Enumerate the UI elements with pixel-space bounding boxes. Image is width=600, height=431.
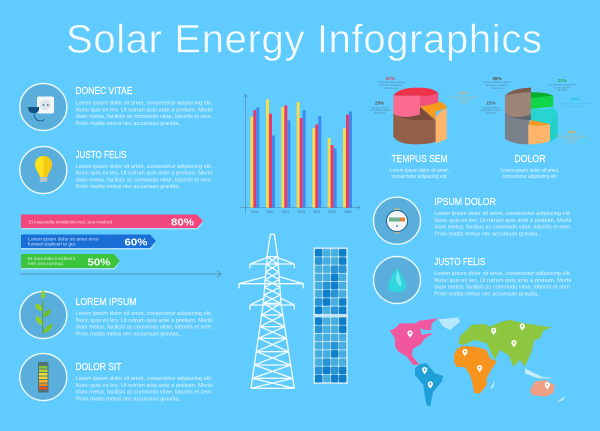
bar: 60%: Lorem ipsum dolor sit amet error: [28, 236, 100, 242]
label: 60%: In hac habitasse platea: [377, 80, 405, 84]
Australia: [530, 380, 555, 397]
text block: Lorem ipsum dolor sit amet, consectetur adipiscing elit.: [434, 271, 572, 277]
heading: DOLOR SIT: [76, 361, 122, 373]
text block: diam metus, facilisis ac commodo vitae, lobortis et sem.: [76, 114, 213, 120]
label: 10%: aenean: [567, 140, 577, 143]
text block: [76, 311, 213, 337]
label: 15%: 15%: [486, 100, 497, 105]
label: 60%: dictumst vestibulum: [379, 83, 403, 87]
pie caption: dolor: Lorem ipsum dolor sit amet,: [500, 168, 560, 174]
text block: diam metus, facilisis ac commodo vitae, lobortis et sem.: [76, 325, 213, 331]
bar: 60%: [21, 234, 156, 250]
label: 15%: est at lobortis: [455, 98, 472, 102]
label: 60%: 60%: [386, 76, 396, 81]
heading: DONEC VITAE: [76, 85, 132, 97]
pie caption: tempus sem: consectetur adipiscing elit.: [392, 174, 448, 180]
text block: Proin mattis metus nec accumsan gravida..: [434, 291, 541, 297]
label: 10%: Sed posuere consectetur: [557, 134, 587, 138]
text block: Nunc quis ex leo. Ut rutrum quis ante a pretium. Morbi: [76, 171, 212, 177]
text block: [76, 100, 213, 127]
bar chart: 2012: [282, 210, 290, 214]
label: 20% teal: est at lobortis: [567, 104, 584, 108]
label: 35%: dictumst vestibulum: [486, 83, 510, 87]
Africa: [454, 346, 497, 393]
text block: Lorem ipsum dolor sit amet, consectetur adipiscing elit.: [76, 164, 213, 170]
text block: [434, 211, 572, 237]
label: 10%: [557, 129, 587, 143]
South America: [415, 363, 443, 407]
text block: diam metus, facilisis ac commodo vitae, lobortis et sem.: [434, 225, 572, 231]
bar chart: 2014: [313, 210, 321, 214]
label: 15%: dignissim: [485, 111, 497, 115]
icon: solar panel: [313, 247, 348, 384]
bar: 50%: Et inacundia incidenint: [28, 256, 76, 261]
pie chart: tempus sem: [369, 76, 478, 144]
text block: Nunc quis ex leo. Ut rutrum quis ante a pretium. Morbi: [434, 218, 571, 224]
label: 25%: sollicitudin massa: [369, 108, 391, 112]
label: 15%: [449, 90, 478, 104]
text block: [76, 376, 213, 402]
Greenland: [438, 317, 460, 330]
text block: diam metus, facilisis ac commodo vitae, lobortis et sem.: [434, 285, 572, 291]
icon: light bulb: [20, 146, 67, 194]
panel: ipsum dolor: [374, 196, 572, 244]
bar chart: 2011: [267, 210, 274, 214]
icon: plug and socket: [20, 84, 67, 130]
label: 20% green: aenean: [558, 89, 567, 92]
icon: meter: [374, 197, 420, 244]
heading: IPSUM DOLOR: [434, 196, 496, 208]
label: 35%: [484, 76, 512, 90]
label: 15%: 15%: [459, 90, 469, 95]
text block: Proin mattis metus nec accumsan gravida..: [434, 231, 541, 237]
panel: justo felis left: [20, 146, 213, 194]
label: 15%: [481, 100, 502, 115]
panel: lorem ipsum: [20, 290, 213, 338]
pie heading: tempus sem: TEMPUS SEM: [392, 153, 448, 165]
text block: Lorem ipsum dolor sit amet, consectetur adipiscing elit.: [76, 376, 213, 382]
label: 25%: Integer lacinia: [371, 105, 388, 109]
bar: 80%: [21, 214, 203, 230]
label: 25%: dignissim: [374, 111, 386, 115]
progress bars: [20, 214, 221, 277]
bar chart: [240, 94, 360, 214]
bar chart: 2010: [251, 210, 259, 214]
label: 60%: [377, 76, 405, 90]
bar: 50%: [21, 254, 120, 270]
Eurasia: [458, 320, 552, 367]
label: 15%: Integer lacinia: [483, 105, 500, 109]
text block: Proin mattis metus nec accumsan gravida..: [76, 184, 182, 190]
text block: [434, 271, 572, 297]
label: 20% teal: Sed posuere consectetur: [560, 101, 590, 105]
text block: Proin mattis metus nec accumsan gravida..: [76, 396, 182, 402]
label: 15%: aenean: [459, 101, 468, 104]
heading: JUSTO FELIS: [76, 149, 126, 161]
label: 10%: est at lobortis: [564, 137, 580, 141]
label: 20% green: [548, 78, 577, 92]
text block: Lorem ipsum dolor sit amet, consectetur adipiscing elit.: [76, 100, 213, 106]
islands: [490, 368, 566, 403]
label: 20% green: est at lobortis: [554, 85, 571, 89]
pie caption: tempus sem: [390, 168, 449, 180]
bar chart: 2015: [328, 210, 336, 214]
text block: Nunc quis ex leo. Ut rutrum quis ante a pretium. Morbi: [434, 278, 571, 284]
text block: Nunc quis ex leo. Ut rutrum quis ante a pretium. Morbi: [76, 107, 212, 113]
bar: 60%: 60%: [124, 236, 148, 248]
bar chart: 2013: [298, 210, 305, 214]
icon: battery: [20, 354, 67, 400]
heading: LOREM IPSUM: [76, 296, 136, 308]
bar chart: 2016: [344, 210, 352, 214]
arrow: [20, 271, 221, 277]
text block: Proin mattis metus nec accumsan gravida..: [76, 331, 182, 337]
label: 20% teal: [560, 97, 590, 108]
label: 25%: 25%: [375, 100, 385, 105]
text block: [76, 164, 213, 190]
label: 35%: 35%: [492, 76, 503, 81]
title: Solar Energy Infographics: [66, 18, 542, 62]
text block: Lorem ipsum dolor sit amet, consectetur adipiscing elit.: [76, 311, 213, 317]
label: 35%: rhoncus est: [491, 86, 505, 90]
text block: diam metus, facilisis ac commodo vitae, lobortis et sem.: [76, 390, 213, 396]
pie caption: dolor: [500, 168, 560, 180]
pie caption: dolor: consectetur adipiscing elit.: [502, 174, 558, 180]
label: 15%: sollicitudin massa: [481, 108, 502, 112]
label: 25%: [369, 100, 391, 115]
pie caption: tempus sem: Lorem ipsum dolor sit amet,: [390, 168, 449, 174]
pie heading: dolor: DOLOR: [514, 153, 546, 165]
label: 10%: 10%: [567, 129, 577, 134]
text block: Proin mattis metus nec accumsan gravida..: [76, 121, 182, 127]
text block: Nunc quis ex leo. Ut rutrum quis ante a pretium. Morbi: [76, 318, 212, 324]
label: 60%: rhoncus est: [384, 86, 398, 90]
icon: transmission tower: [239, 234, 303, 388]
bar: 60%: funsset explicari te gui.: [28, 242, 76, 246]
label: 20% green: Sed posuere consectetur: [548, 83, 577, 87]
icon: green plant: [20, 290, 67, 338]
bar: 50%: 50%: [88, 256, 111, 268]
bar: 50%: mel, eos nostrud.: [28, 261, 64, 266]
bar: 80%: Et inacundia incidenint mel, eos nostrud.: [28, 220, 114, 224]
panel: donec vitae: [20, 84, 213, 130]
panel: justo felis right: [374, 256, 572, 304]
label: 15%: Sed posuere consectetur: [449, 95, 478, 99]
text block: Lorem ipsum dolor sit amet, consectetur adipiscing elit.: [434, 211, 572, 217]
pie chart: dolor: [481, 76, 590, 144]
panel: dolor sit: [20, 354, 213, 402]
North America: [383, 318, 438, 365]
bar: 80%: 80%: [171, 216, 195, 228]
text block: diam metus, facilisis ac commodo vitae, lobortis et sem.: [76, 177, 213, 183]
icon: water drop: [374, 256, 420, 304]
map pins: [407, 323, 550, 389]
label: 35%: In hac habitasse platea: [484, 80, 512, 84]
heading: JUSTO FELIS: [434, 256, 485, 268]
text block: Nunc quis ex leo. Ut rutrum quis ante a pretium. Morbi: [76, 383, 212, 389]
label: 20% green: 20%: [558, 78, 568, 83]
label: 20% teal: 20%: [570, 97, 580, 102]
world map: [383, 317, 566, 407]
